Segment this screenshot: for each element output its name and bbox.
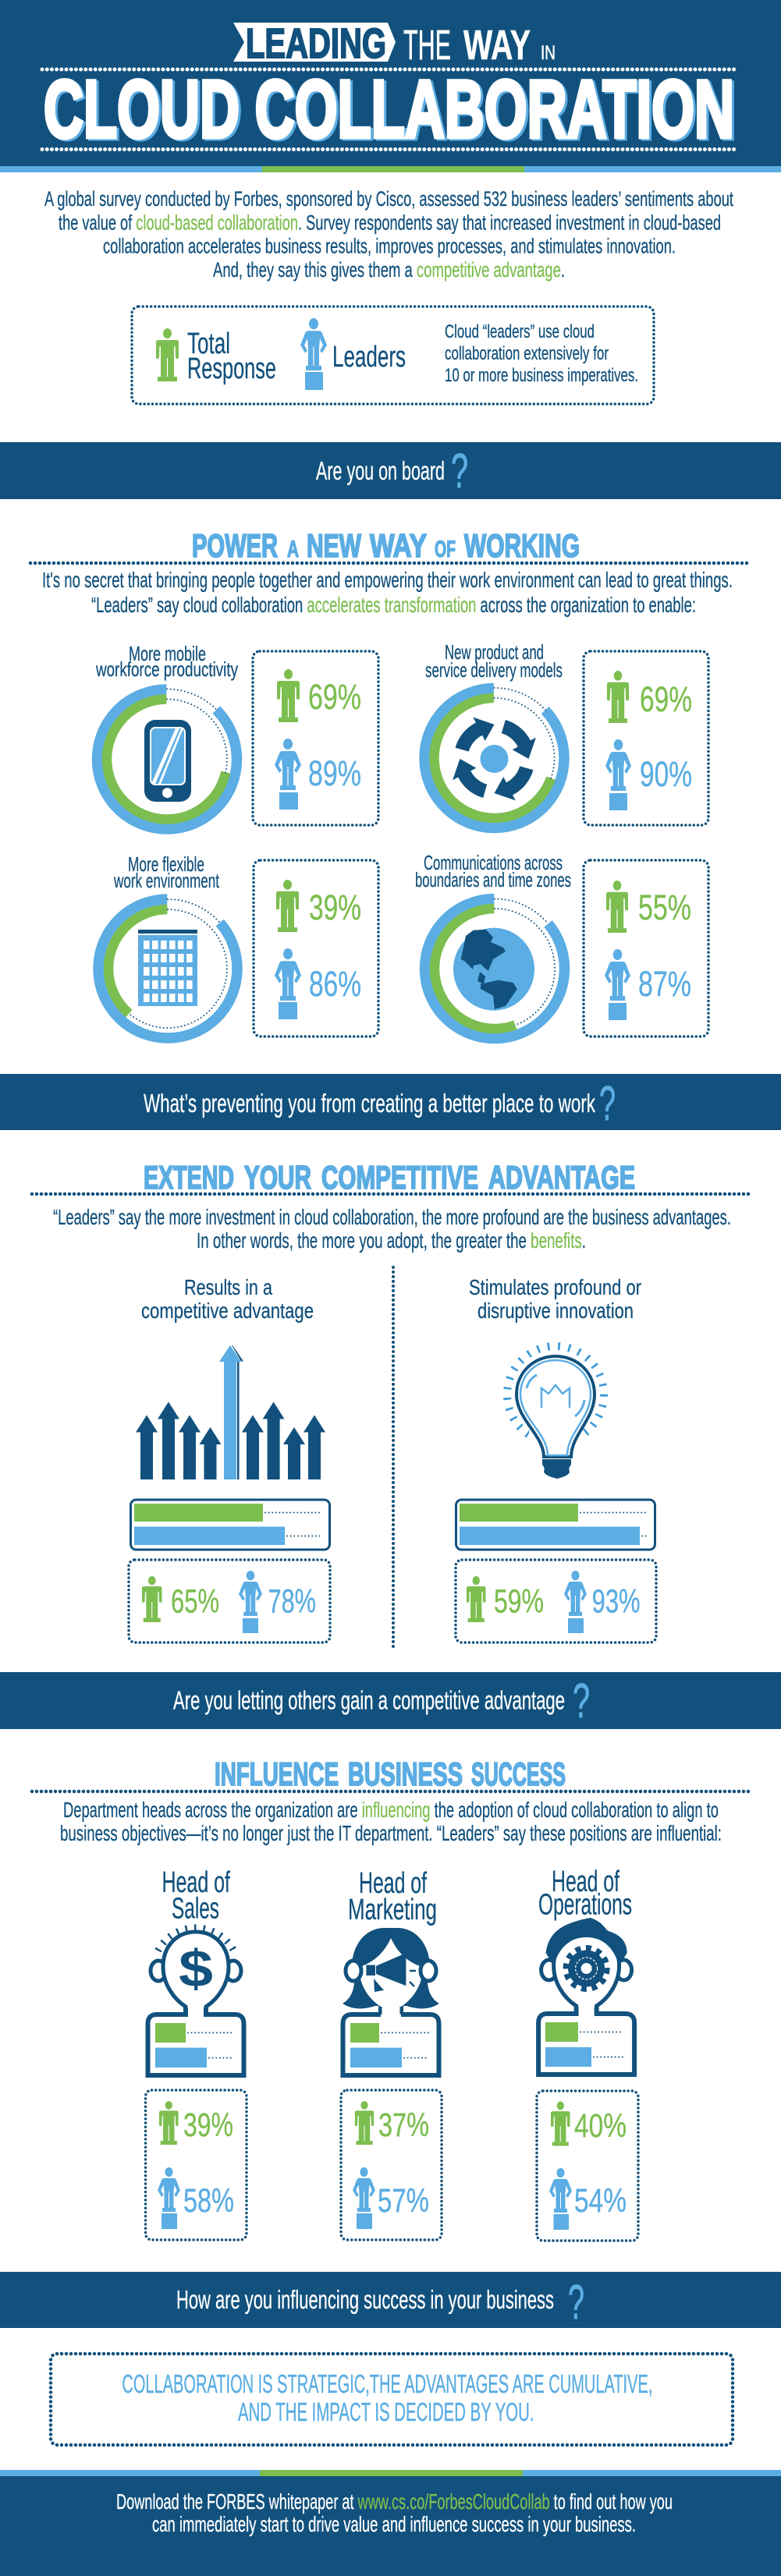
label: New product and — [445, 640, 544, 664]
callout — [51, 2354, 733, 2445]
question band 1: Are you on board — [316, 456, 445, 485]
label: boundaries and time zones — [415, 868, 571, 891]
label — [348, 1867, 437, 1926]
stats box: 54% — [574, 2182, 627, 2220]
label: service delivery models — [425, 658, 563, 682]
stats box: 78% — [268, 1583, 316, 1621]
section text: working — [42, 568, 733, 617]
footer text — [116, 2489, 673, 2536]
label — [425, 640, 563, 682]
label: work environment — [113, 869, 220, 892]
legend: leaders — [300, 318, 406, 390]
panel: communications across boundaries — [415, 851, 708, 1039]
label: Sales — [172, 1892, 219, 1925]
stats box: 39% — [309, 888, 361, 927]
section text: influence — [60, 1798, 722, 1845]
legend note: Cloud “leaders” use cloud — [445, 321, 595, 342]
panel: flexible work environment — [98, 852, 378, 1038]
stats box: 65% — [171, 1583, 219, 1621]
title: the way in: IN — [541, 42, 556, 64]
label — [95, 642, 238, 681]
title: the way in: THE — [403, 22, 451, 69]
heading: power a new way of working: NEW — [307, 527, 361, 564]
label: competitive advantage — [141, 1299, 314, 1323]
stats box: 93% — [592, 1583, 641, 1621]
stats box: 89% — [308, 753, 361, 793]
label: Communications across — [424, 851, 563, 874]
label: Stimulates profound or — [469, 1275, 641, 1299]
heading: influence business success: INFLUENCE — [215, 1756, 339, 1792]
question band 2 — [0, 1074, 781, 1131]
heading: extend your competitive advantage: ADVANTAGE — [488, 1159, 635, 1196]
bar chart — [456, 1500, 655, 1550]
label: Results in a — [184, 1275, 272, 1299]
label — [538, 1866, 632, 1922]
stats box: 69% — [308, 677, 361, 717]
heading: influence business success — [215, 1756, 566, 1792]
question band 1 — [0, 442, 781, 499]
heading: extend your competitive advantage: COMPETITIVE — [321, 1159, 478, 1196]
label: Operations — [538, 1889, 632, 1922]
title: the way in — [403, 22, 556, 69]
question band 4: How are you influencing success in your business — [176, 2285, 554, 2314]
heading: power a new way of working: OF — [435, 537, 456, 562]
panel: competitive advantage — [129, 1275, 330, 1642]
stats box — [253, 651, 378, 825]
heading: power a new way of working: POWER — [192, 527, 278, 564]
label — [415, 851, 571, 891]
panel: head of marketing — [341, 1867, 442, 2240]
heading: power a new way of working: WORKING — [464, 527, 580, 564]
label — [162, 1866, 230, 1925]
legend box — [132, 306, 654, 404]
stats box: 86% — [309, 964, 361, 1004]
stats box — [537, 2091, 638, 2241]
label: Head of — [162, 1866, 230, 1899]
heading: power a new way of working: WAY — [370, 527, 427, 564]
stats box: 37% — [378, 2107, 429, 2144]
stats box: 59% — [494, 1583, 544, 1621]
panel: head of sales — [145, 1866, 247, 2240]
legend note — [445, 321, 638, 386]
label: Head of — [359, 1867, 427, 1900]
legend: total response: Total — [187, 328, 230, 360]
heading: influence business success: SUCCESS — [471, 1756, 566, 1792]
section text: advantage: In other words, the more you adopt, the greater the benefits. — [197, 1228, 586, 1253]
stats box: 39% — [183, 2107, 233, 2144]
stats box: 57% — [378, 2182, 429, 2220]
legend: leaders: Leaders — [332, 341, 406, 374]
donut chart — [97, 689, 237, 829]
stats box: 58% — [183, 2182, 234, 2220]
callout: AND THE IMPACT IS DECIDED BY YOU. — [238, 2397, 534, 2426]
panel: disruptive innovation — [456, 1275, 656, 1642]
icon: smartphone — [144, 720, 191, 802]
intro paragraph: And, they say this gives them a competitive advantage. — [213, 258, 565, 282]
stats box — [584, 860, 708, 1036]
section text: advantage — [53, 1205, 731, 1253]
label — [141, 1275, 314, 1323]
title flag: leading: LEADING — [246, 20, 386, 67]
stats box: 40% — [574, 2107, 627, 2145]
heading: influence business success: BUSINESS — [348, 1756, 463, 1792]
stats box: 55% — [638, 888, 691, 927]
question band 3: Are you letting others gain a competitive advantage — [173, 1686, 565, 1714]
legend: total response: Response — [187, 353, 276, 385]
intro paragraph — [44, 187, 733, 282]
label: Marketing — [348, 1894, 437, 1926]
label: Head of — [552, 1866, 619, 1898]
heading: power a new way of working — [192, 527, 580, 564]
stats box: 69% — [640, 679, 692, 719]
icon: head with dollar — [148, 1928, 243, 2075]
icon: head with gear — [538, 1918, 634, 2075]
panel: head of operations — [537, 1866, 638, 2241]
stats box: 90% — [640, 754, 692, 794]
stats box — [145, 2090, 247, 2240]
question band 1: ? — [451, 445, 468, 498]
legend note: 10 or more business imperatives. — [445, 365, 638, 386]
stats box — [456, 1560, 656, 1642]
donut chart — [424, 898, 565, 1039]
header banner — [0, 0, 781, 172]
footer text: Download the FORBES whitepaper at www.cs.co/ForbesCloudCollab to find out how you — [116, 2489, 673, 2514]
heading: power a new way of working: A — [287, 537, 299, 562]
stats box — [129, 1560, 330, 1642]
stats box — [341, 2090, 442, 2240]
label — [469, 1275, 641, 1323]
icon: head with dollar: $ — [179, 1940, 213, 1998]
question band 2: ? — [599, 1077, 616, 1131]
stats box — [254, 860, 378, 1036]
icon: circular arrows — [451, 715, 538, 803]
donut chart — [98, 899, 237, 1038]
stats box: 87% — [638, 964, 691, 1004]
bar chart — [131, 1500, 329, 1550]
panel: mobile productivity — [95, 642, 378, 829]
donut chart — [424, 688, 564, 828]
icon: office building — [138, 930, 197, 1006]
question band 3: ? — [573, 1674, 590, 1728]
icon: head with megaphone — [343, 1928, 439, 2075]
panel: product and service delivery — [424, 640, 708, 828]
heading: extend your competitive advantage — [144, 1159, 635, 1196]
footer stripe — [0, 2470, 781, 2476]
title: the way in: WAY — [463, 22, 531, 69]
icon: globe — [453, 928, 534, 1011]
icon: rising arrows — [136, 1345, 325, 1479]
label: disruptive innovation — [477, 1299, 634, 1323]
heading: extend your competitive advantage: YOUR — [244, 1159, 311, 1196]
icon: light bulb — [507, 1346, 604, 1479]
question band 4: ? — [568, 2276, 584, 2330]
footer — [0, 2470, 781, 2576]
label: workforce productivity — [95, 657, 238, 681]
stats box — [584, 651, 708, 825]
question band 3 — [0, 1672, 781, 1729]
header stripe — [0, 166, 781, 172]
question band 4 — [0, 2272, 781, 2330]
label — [113, 852, 220, 892]
legend note: collaboration extensively for — [445, 343, 609, 364]
label: More mobile — [129, 642, 206, 665]
label: More flexible — [128, 852, 204, 876]
heading: extend your competitive advantage: EXTEND — [144, 1159, 234, 1196]
legend: total response — [156, 328, 276, 385]
